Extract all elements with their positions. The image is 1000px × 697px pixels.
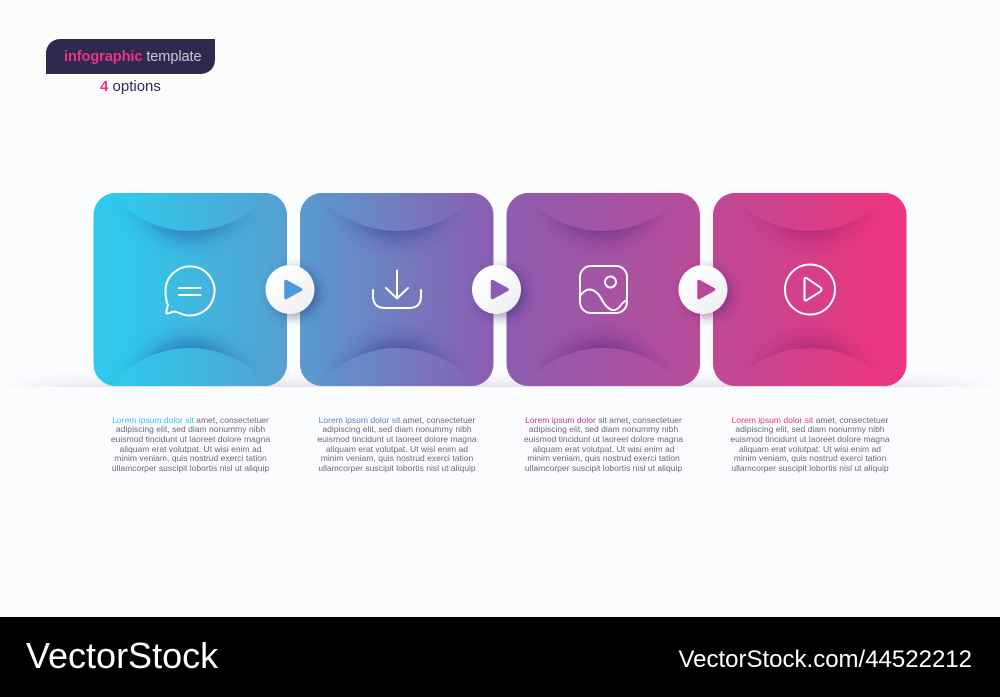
watermark footer bar bbox=[0, 617, 1000, 697]
icon: speech bubble bbox=[165, 266, 214, 315]
text block 4: ullamcorper suscipit lobortis nisl ut aliquip bbox=[731, 463, 889, 473]
text block 2 bbox=[317, 414, 477, 473]
text block 1: adipiscing elit, sed diam nonummy nibh bbox=[116, 424, 265, 434]
text block 1: euismod tincidunt ut laoreet dolore magna bbox=[111, 434, 270, 444]
subtitle: 4 options bbox=[100, 78, 161, 95]
text block 3 bbox=[524, 414, 684, 473]
arrow button 3 bbox=[678, 265, 732, 317]
text block 4: aliquam erat volutpat. Ut wisi enim ad bbox=[739, 444, 881, 454]
text block 4: adipiscing elit, sed diam nonummy nibh bbox=[735, 424, 885, 434]
icon: download bbox=[373, 270, 421, 308]
arrow button 2 bbox=[472, 265, 526, 317]
text block 2: aliquam erat volutpat. Ut wisi enim ad bbox=[326, 444, 468, 454]
title badge bbox=[46, 39, 215, 74]
text block 3: minim veniam, quis nostrud exerci tation bbox=[527, 453, 680, 463]
title text: infographic template bbox=[64, 49, 202, 65]
icon: play circle bbox=[785, 264, 835, 314]
text block 3: aliquam erat volutpat. Ut wisi enim ad bbox=[532, 444, 675, 454]
text block 1 bbox=[111, 414, 270, 473]
text block 1: aliquam erat volutpat. Ut wisi enim ad bbox=[119, 444, 262, 454]
floor shadow bbox=[38, 379, 961, 387]
arrow button 1 bbox=[266, 265, 319, 317]
text block 4: Lorem ipsum dolor sit amet, consectetuer bbox=[732, 414, 888, 424]
icon: image bbox=[580, 266, 627, 313]
text block 3: adipiscing elit, sed diam nonummy nibh bbox=[529, 424, 678, 434]
card 4 bbox=[713, 193, 906, 386]
text block 2: Lorem ipsum dolor sit amet, consectetuer bbox=[319, 414, 475, 424]
card 1 bbox=[94, 193, 287, 386]
text block 2: adipiscing elit, sed diam nonummy nibh bbox=[322, 424, 472, 434]
VectorStock URL: VectorStock.com/44522212 bbox=[678, 646, 972, 673]
text block 1: minim veniam, quis nostrud exerci tation bbox=[114, 453, 267, 463]
text block 4: euismod tincidunt ut laoreet dolore magna bbox=[730, 434, 890, 444]
text block 2: minim veniam, quis nostrud exerci tation bbox=[321, 453, 473, 463]
text block 3: Lorem ipsum dolor sit amet, consectetuer bbox=[525, 414, 682, 424]
text block 2: euismod tincidunt ut laoreet dolore magna bbox=[317, 434, 477, 444]
card 2 bbox=[300, 193, 494, 386]
text block 2: ullamcorper suscipit lobortis nisl ut aliquip bbox=[318, 463, 476, 473]
VectorStock logo text: VectorStock bbox=[26, 635, 218, 676]
text block 1: ullamcorper suscipit lobortis nisl ut aliquip bbox=[112, 463, 269, 473]
card 3 bbox=[506, 193, 700, 386]
text block 3: euismod tincidunt ut laoreet dolore magna bbox=[524, 434, 683, 444]
text block 1: Lorem ipsum dolor sit amet, consectetuer bbox=[112, 414, 269, 424]
text block 4: minim veniam, quis nostrud exerci tation bbox=[734, 453, 886, 463]
text block 4 bbox=[730, 414, 890, 473]
text block 3: ullamcorper suscipit lobortis nisl ut aliquip bbox=[525, 463, 682, 473]
infographic diagram: cards, arrows and icons bbox=[38, 193, 961, 387]
